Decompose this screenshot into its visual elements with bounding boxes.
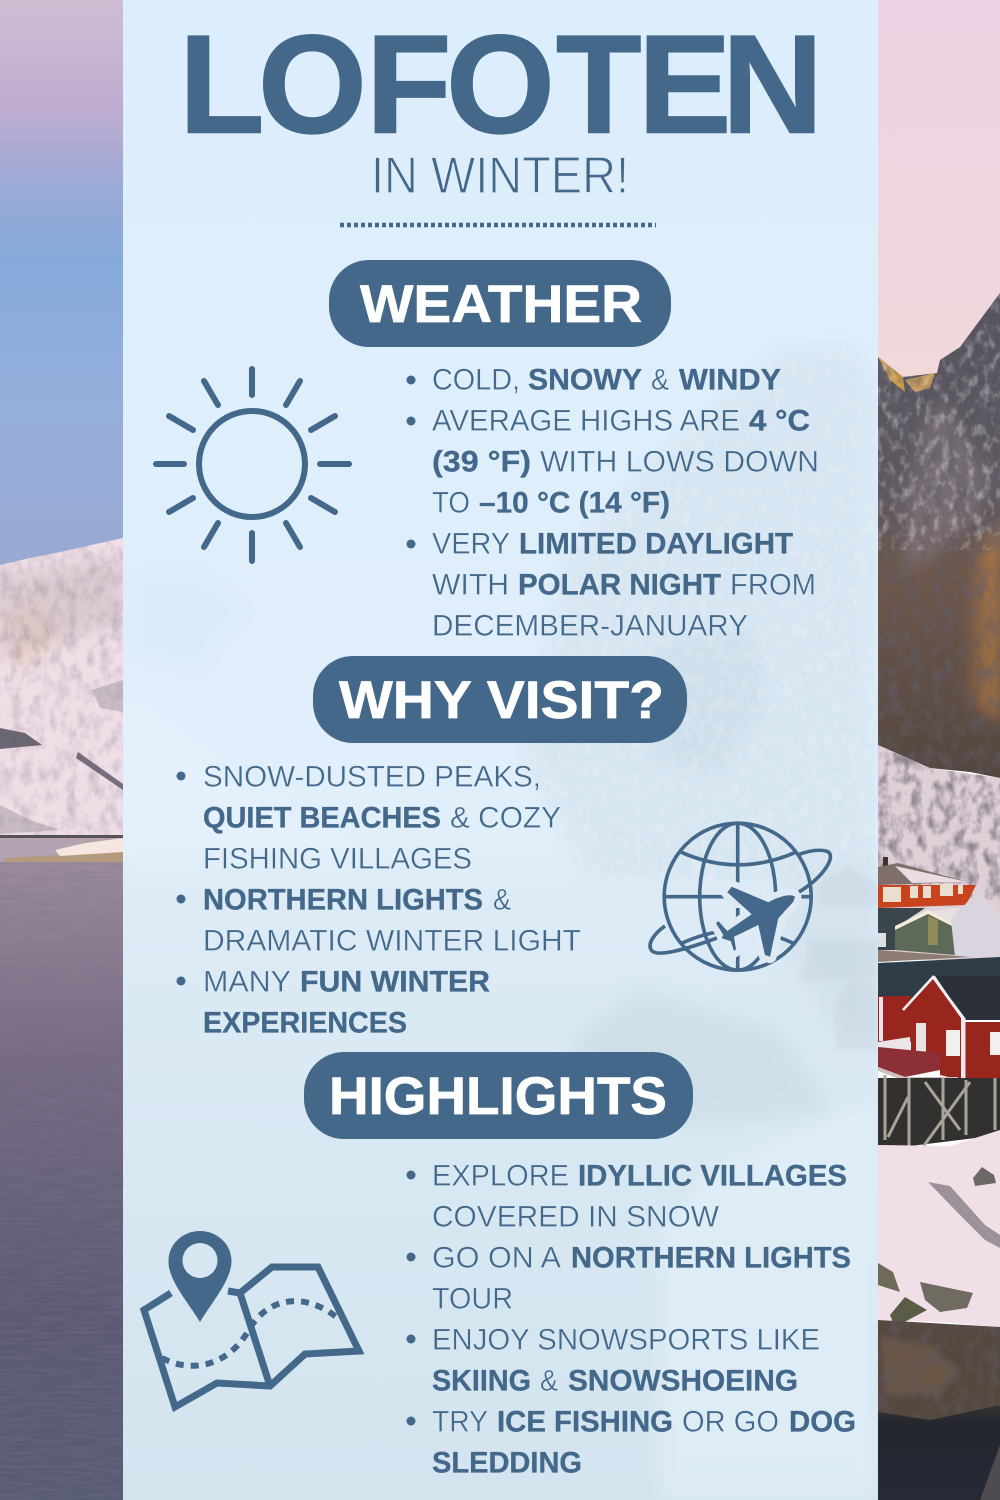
list: why visit: MANY [203, 966, 291, 998]
list: highlights: OR GO [682, 1406, 779, 1438]
list: highlights: DOG [789, 1406, 856, 1438]
list: why visit: SNOW-DUSTED PEAKS, [203, 760, 541, 794]
list: why visit: FISHING VILLAGES [203, 842, 472, 876]
icon: sun [156, 369, 349, 561]
heading: weather: WEATHER [360, 275, 642, 334]
list: highlights: SLEDDING [432, 1446, 582, 1480]
icon: map with location pin [144, 1231, 359, 1407]
background photo: right strip [877, 0, 1000, 1500]
list: highlights: SKIING [432, 1364, 531, 1398]
list: why visit: NORTHERN LIGHTS [203, 884, 483, 916]
list: weather: FROM [730, 568, 816, 602]
list: weather: WITH [432, 568, 509, 602]
list: weather: –10 °C (14 °F) [479, 486, 670, 520]
list: weather: & [651, 364, 669, 396]
list: highlights: & [540, 1364, 558, 1398]
icon: globe with plane [650, 823, 831, 970]
title: LOFOTEN [179, 6, 823, 162]
list: weather: WINDY [679, 364, 781, 396]
list: why visit: DRAMATIC WINTER LIGHT [203, 924, 581, 958]
list: weather: LIMITED DAYLIGHT [519, 528, 793, 560]
list: weather: VERY [432, 528, 510, 560]
translucent centre panel [123, 0, 880, 1500]
list: why visit: & [493, 884, 511, 916]
subtitle: IN WINTER! [371, 147, 629, 205]
list: highlights: GO ON A [432, 1242, 561, 1274]
heading: why visit [313, 656, 687, 743]
list: why visit: FUN WINTER [300, 966, 490, 998]
heading: highlights: HIGHLIGHTS [329, 1067, 667, 1126]
list: weather: SNOWY [528, 364, 642, 396]
shore rocks [878, 1167, 1000, 1500]
list: highlights: TRY [432, 1406, 488, 1438]
list: why visit: QUIET BEACHES [203, 802, 441, 834]
list: weather: DECEMBER-JANUARY [432, 610, 748, 642]
list: highlights: IDYLLIC VILLAGES [578, 1160, 847, 1192]
list: weather: 4 °C [749, 404, 810, 438]
list: weather: WITH LOWS DOWN [540, 446, 819, 478]
dotted divider [340, 223, 656, 227]
list: highlights: EXPLORE [432, 1160, 569, 1192]
list: weather: AVERAGE HIGHS ARE [432, 404, 740, 438]
green and white houses [878, 890, 1000, 962]
list: highlights [406, 1160, 856, 1480]
list: why visit: EXPERIENCES [203, 1006, 407, 1040]
list: highlights: COVERED IN SNOW [432, 1200, 719, 1234]
list: weather [406, 364, 819, 642]
list: weather: COLD, [432, 364, 520, 396]
stilts and rocks [878, 1075, 1000, 1150]
list: weather: (39 °F) [432, 446, 531, 478]
list: why visit [176, 760, 581, 1040]
list: highlights: NORTHERN LIGHTS [571, 1242, 851, 1274]
heading: weather [329, 260, 671, 347]
list: why visit: & COZY [450, 802, 561, 834]
list: highlights: ICE FISHING [497, 1406, 673, 1438]
heading: highlights [304, 1052, 693, 1139]
foreground boulder [980, 1445, 1000, 1500]
heading: why visit: WHY VISIT? [339, 671, 664, 730]
list: weather: POLAR NIGHT [518, 568, 721, 602]
orange house [878, 857, 976, 908]
list: highlights: ENJOY SNOWSPORTS LIKE [432, 1324, 820, 1356]
list: highlights: SNOWSHOEING [568, 1364, 798, 1398]
list: highlights: TOUR [432, 1282, 513, 1316]
background photo: left strip [0, 0, 124, 1500]
red cabins [878, 957, 1000, 1080]
list: weather: TO [432, 486, 470, 520]
faint mountain through panel [123, 340, 880, 1500]
snowy shore [878, 1130, 1000, 1327]
